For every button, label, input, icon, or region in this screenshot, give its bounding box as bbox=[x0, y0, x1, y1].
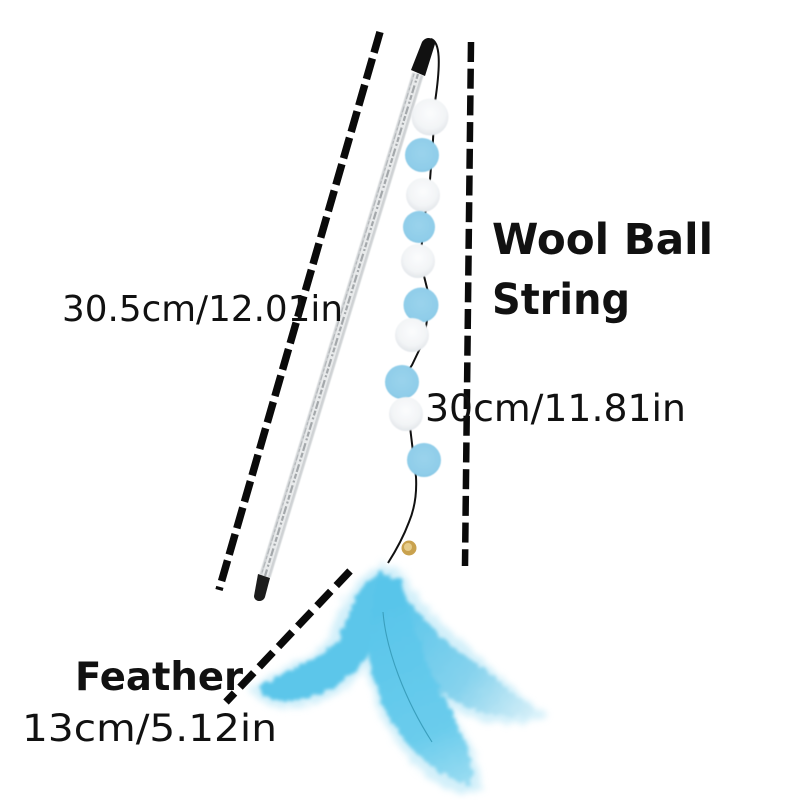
feather: rachis bbox=[383, 612, 432, 742]
icon: feather bbox=[250, 564, 548, 793]
icon: string bbox=[388, 39, 439, 563]
icon: wand bottom cap bbox=[254, 574, 270, 601]
heading: Wool Ball String bbox=[492, 215, 713, 325]
ball 9 white bbox=[389, 397, 423, 431]
feather: left plume bbox=[258, 572, 398, 701]
icon: transparent wand bbox=[254, 38, 435, 601]
ball 8 blue bbox=[385, 365, 419, 399]
heading: Feather: Feather bbox=[75, 655, 244, 700]
wool balls bbox=[385, 98, 448, 477]
label: wand length: 30.5cm/12.01in bbox=[62, 289, 343, 330]
heading: Wool Ball String: Wool Ball bbox=[492, 215, 713, 265]
feather: right plume bbox=[388, 572, 536, 716]
ball 2 blue bbox=[405, 138, 439, 172]
icon: bell bbox=[402, 540, 416, 556]
ball 3 white bbox=[406, 178, 440, 212]
ball 4 blue bbox=[403, 211, 435, 243]
label: feather length: 13cm/5.12in bbox=[22, 707, 277, 750]
feather: middle plume bbox=[369, 578, 472, 786]
ball 5 white bbox=[401, 244, 435, 278]
label: string length: 30cm/11.81in bbox=[425, 387, 686, 430]
ball 7 white bbox=[395, 318, 429, 352]
ball 6 blue bbox=[404, 288, 438, 322]
ball 1 white bbox=[412, 98, 448, 136]
dashed line: wand length bbox=[219, 32, 380, 590]
ball 10 blue bbox=[407, 443, 441, 477]
dashed line: string length bbox=[465, 42, 471, 566]
dashed line: feather length bbox=[226, 571, 350, 702]
heading: Wool Ball String: String bbox=[492, 275, 630, 325]
icon: wand top cap bbox=[411, 38, 435, 76]
